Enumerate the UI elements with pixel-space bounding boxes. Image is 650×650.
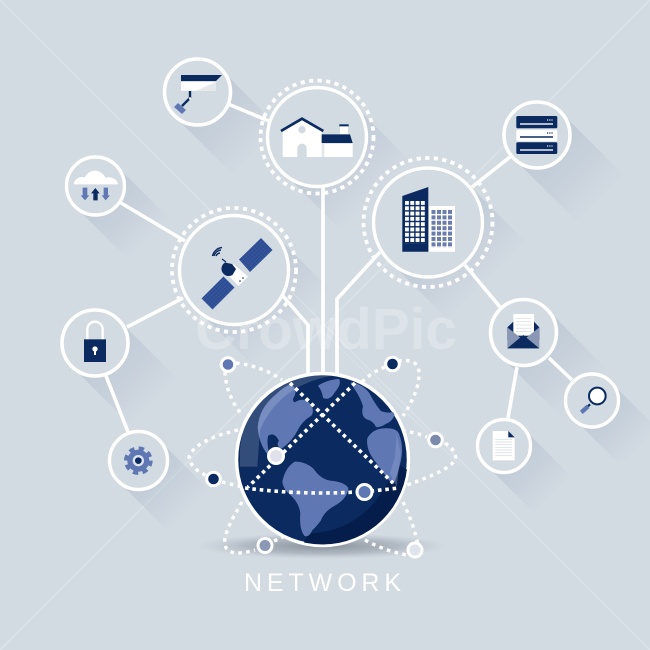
icon: magnifier bbox=[581, 388, 606, 412]
orbit nodes bbox=[207, 357, 442, 557]
long shadows bbox=[95, 92, 640, 512]
node: buildings bbox=[364, 158, 492, 287]
icon: cloud transfer bbox=[74, 171, 118, 200]
dark lower crescent bbox=[304, 466, 407, 544]
south america bbox=[283, 463, 347, 535]
globe bbox=[236, 374, 413, 553]
node: document bbox=[478, 420, 530, 472]
node: mail bbox=[490, 300, 556, 366]
icon: security camera bbox=[174, 75, 222, 114]
node: cloud bbox=[66, 157, 124, 215]
europe and asia bbox=[352, 383, 394, 426]
continents bbox=[240, 374, 413, 553]
node: lock bbox=[62, 310, 128, 376]
node: server bbox=[504, 102, 570, 168]
node: camera bbox=[164, 59, 230, 125]
icon: padlock bbox=[84, 322, 106, 362]
node: gear bbox=[110, 432, 168, 490]
globe node right bbox=[357, 484, 372, 500]
greenland bbox=[319, 380, 339, 398]
gloss highlight bbox=[240, 374, 337, 467]
icon: server rack bbox=[516, 116, 557, 154]
globe node left bbox=[268, 448, 284, 464]
watermark text: CrowdPic bbox=[195, 297, 457, 362]
ground shadow bbox=[197, 533, 447, 559]
africa bbox=[368, 429, 401, 483]
globe sphere bbox=[236, 374, 408, 546]
title: NETWORK bbox=[244, 569, 401, 597]
icon: document bbox=[493, 431, 515, 460]
orbit dashes bbox=[189, 360, 456, 555]
node: satellite bbox=[172, 208, 296, 332]
icon: open envelope bbox=[507, 314, 539, 348]
route dashes bbox=[245, 383, 398, 493]
north america bbox=[259, 385, 312, 453]
node: magnifier bbox=[566, 374, 618, 427]
connector lines bbox=[106, 104, 572, 432]
icon: satellite bbox=[202, 238, 272, 310]
icon: house bbox=[281, 119, 353, 157]
icon: gear bbox=[126, 448, 151, 473]
node: house bbox=[260, 80, 374, 194]
icon: office buildings bbox=[402, 187, 455, 252]
